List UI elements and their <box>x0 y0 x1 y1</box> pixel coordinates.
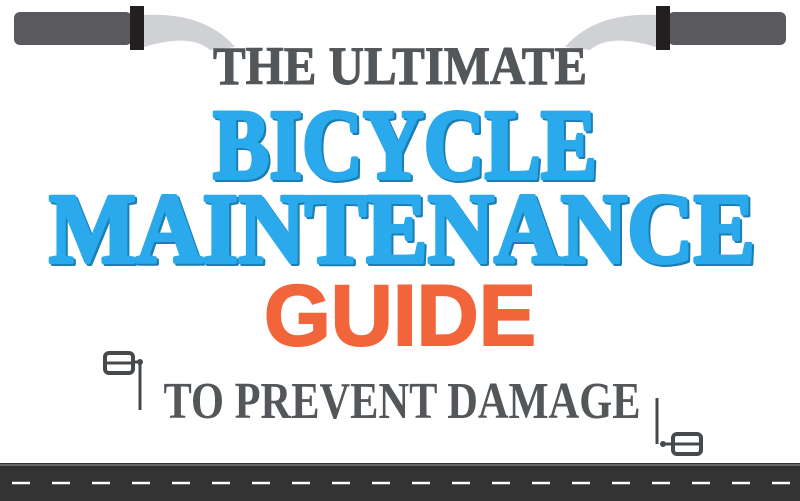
title: MAINTENANCE: MAINTENANCE <box>49 173 755 284</box>
road <box>0 463 800 501</box>
title: THE ULTIMATE: THE ULTIMATE <box>213 36 587 96</box>
title: BICYCLE: BICYCLE <box>215 91 599 202</box>
title: GUIDE: GUIDE <box>264 268 536 364</box>
icon: left pedal <box>105 353 143 410</box>
icon: right pedal <box>657 398 701 454</box>
subtitle: TO PREVENT DAMAGE: TO PREVENT DAMAGE <box>164 373 640 430</box>
icon: left handlebar <box>14 6 235 50</box>
icon: right handlebar <box>565 6 786 50</box>
title: BICYCLE: BICYCLE <box>213 89 597 200</box>
title: MAINTENANCE: MAINTENANCE <box>51 175 757 286</box>
